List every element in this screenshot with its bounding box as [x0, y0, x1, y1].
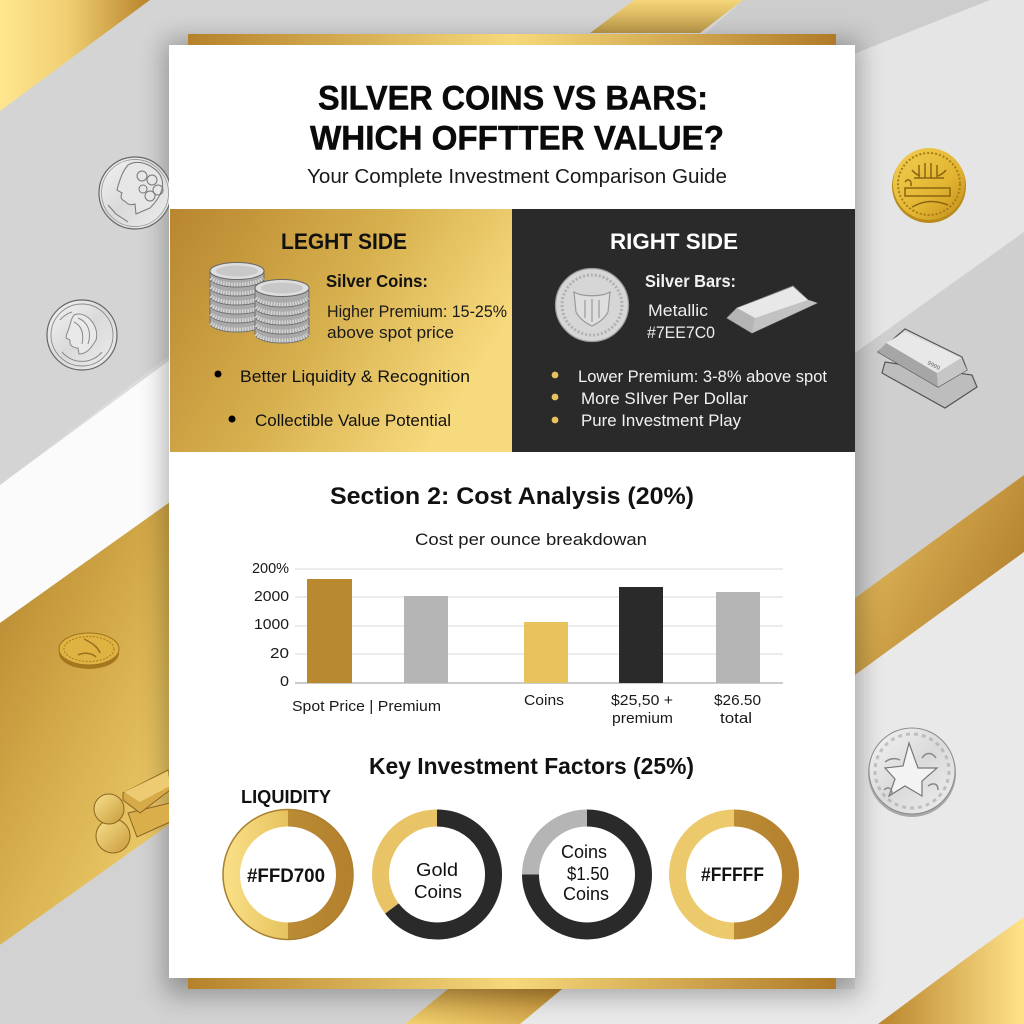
- icon: gold bars and knobs: [94, 770, 170, 853]
- icon: silver star coin: [868, 728, 956, 817]
- donut: gold coins: [381, 818, 494, 931]
- gold bar bottom: [188, 978, 836, 989]
- bar subheading: Silver Bars:: [645, 271, 736, 291]
- bar chart: [252, 560, 783, 727]
- title: [310, 80, 724, 158]
- x axis labels: Coins: [524, 692, 564, 709]
- chart subtitle: Cost per ounce breakdowan: [415, 530, 647, 549]
- bar bullets: Lower Premium: 3-8% above spot: [578, 367, 827, 386]
- donut: coins premium: [530, 818, 644, 931]
- y axis labels: 20: [270, 645, 289, 662]
- coin premium text: [327, 302, 507, 342]
- icon: silver bar: [727, 286, 817, 333]
- title: SILVER COINS VS BARS:: [318, 80, 708, 118]
- coin bullets: [214, 367, 470, 430]
- donut: gold coins: Gold: [416, 859, 458, 880]
- x axis labels: premium: [612, 710, 673, 727]
- icon: silver bars stack: 9999: [926, 360, 941, 372]
- donut: coins premium: Coins: [561, 841, 607, 862]
- y axis labels: 2000: [254, 588, 289, 605]
- heading: left side: LEGHT SIDE: [281, 229, 407, 254]
- x axis labels: total: [720, 710, 752, 727]
- coin bullets: Better Liquidity & Recognition: [240, 367, 470, 386]
- coin premium text: Higher Premium: 15-25%: [327, 302, 507, 321]
- bar bullets: Pure Investment Play: [581, 411, 741, 430]
- donut: coins premium: $1.50: [567, 863, 609, 884]
- bar metallic text: #7EE7C0: [647, 323, 715, 342]
- icon: gold coin: [892, 148, 966, 223]
- bar metallic text: Metallic: [648, 301, 709, 320]
- coin bullets: Collectible Value Potential: [255, 411, 451, 430]
- donut: gold coins: Coins: [414, 881, 462, 902]
- y axis labels: 0: [280, 673, 289, 690]
- x axis labels: $26.50: [714, 692, 761, 709]
- icon: flat gold coin: [59, 633, 119, 669]
- x axis labels: Spot Price | Premium: [292, 698, 441, 715]
- icon: silver bars stack: [878, 329, 977, 408]
- panel shadow: [165, 40, 859, 995]
- bars: [307, 579, 760, 683]
- heading: right side: RIGHT SIDE: [610, 229, 738, 254]
- y axis labels: 200%: [252, 560, 289, 577]
- coin subheading: Silver Coins:: [326, 271, 428, 291]
- panel: left side silver coins: [170, 209, 512, 452]
- x axis labels: $25,50 +: [611, 692, 673, 709]
- icon: coin stacks: [210, 262, 309, 343]
- donut: coins premium: Coins: [563, 883, 609, 904]
- donut: gold liquidity: [223, 810, 353, 940]
- heading: key investment factors: Key Investment Factors (25%): [369, 753, 694, 779]
- bar bullets: [552, 367, 827, 430]
- bar bullets: More SIlver Per Dollar: [581, 389, 748, 408]
- main white panel: [169, 45, 855, 978]
- icon: silver coin: [556, 268, 628, 342]
- heading: cost analysis: Section 2: Cost Analysis (20%): [330, 483, 694, 510]
- icon: silver portrait coin lower: [47, 300, 117, 370]
- icon: silver portrait coin: [99, 157, 171, 229]
- coin premium text: above spot price: [327, 323, 454, 342]
- panel: right side silver bars: [512, 209, 855, 452]
- title: WHICH OFFTTER VALUE?: [310, 120, 724, 158]
- gold bar top: [188, 34, 836, 45]
- y axis labels: 1000: [254, 616, 289, 633]
- label: liquidity: LIQUIDITY: [241, 787, 331, 807]
- donut: gold liquidity: #FFD700: [247, 866, 325, 887]
- donut: white: #FFFFF: [701, 865, 764, 886]
- donut: white: [678, 818, 790, 931]
- y axis labels: [252, 560, 289, 690]
- x axis labels: [292, 692, 761, 727]
- bar metallic text: [647, 301, 715, 342]
- subtitle: Your Complete Investment Comparison Guide: [307, 166, 727, 188]
